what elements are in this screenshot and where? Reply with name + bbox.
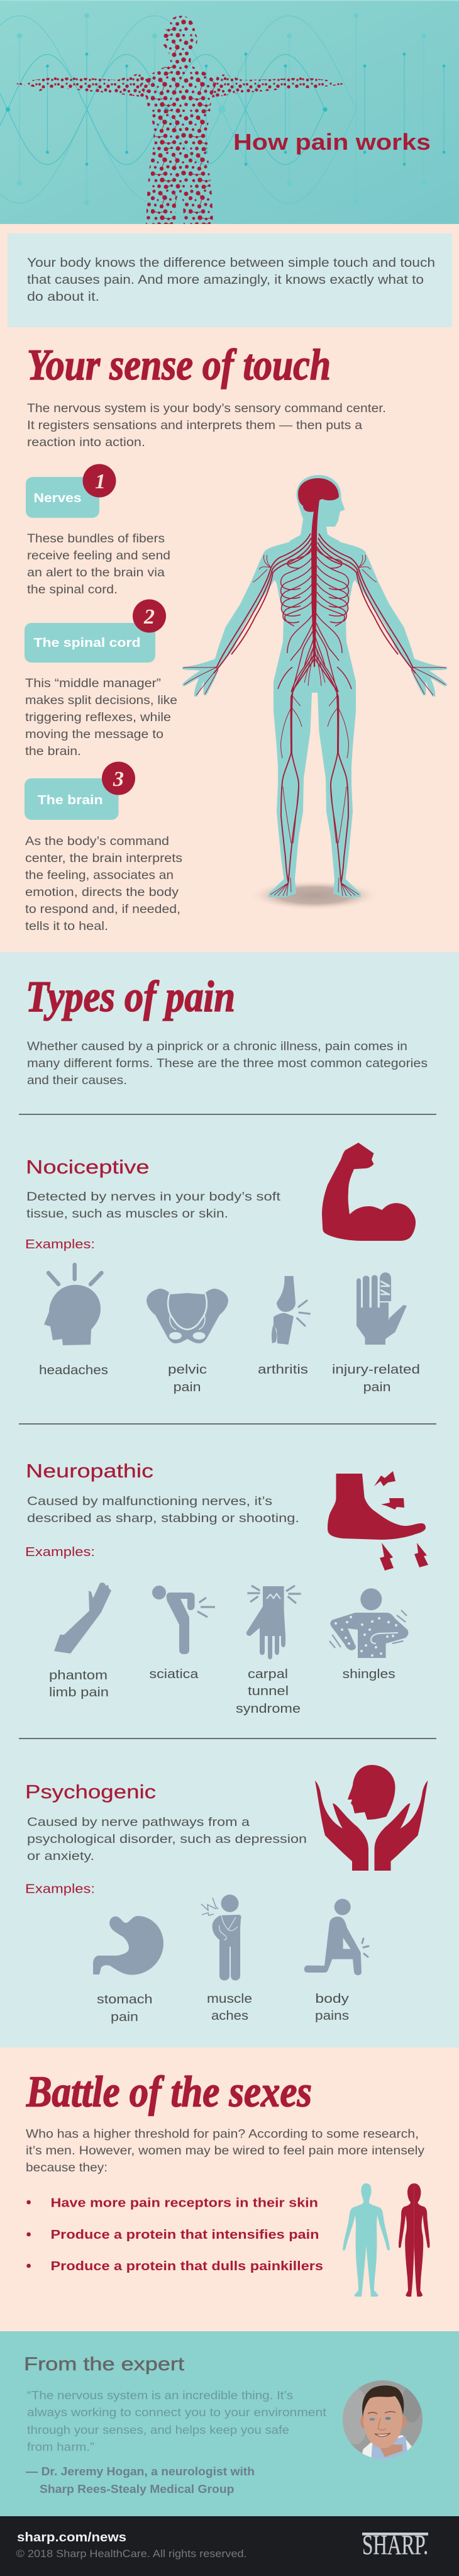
text: the spinal cord	[25, 676, 177, 758]
text: nerves: the spinal cord.	[27, 583, 118, 596]
text: the brain: center, the brain interprets	[25, 851, 182, 865]
icon: stomach	[93, 1916, 163, 1975]
labels: pelvic	[168, 1363, 207, 1377]
labels: sciatica	[149, 1667, 199, 1681]
bullet list: Have more pain receptors in their skin	[50, 2196, 318, 2210]
labels: carpal	[248, 1667, 288, 1681]
left nerves	[183, 534, 314, 896]
brain and spinal cord	[298, 478, 339, 667]
labels	[97, 1992, 349, 2024]
bullet list: Produce a protein that dulls painkillers	[50, 2260, 323, 2273]
labels: limb pain	[49, 1686, 109, 1700]
labels: body	[315, 1992, 349, 2006]
text: the spinal cord: This “middle manager”	[25, 676, 161, 690]
labels: stomach	[97, 1993, 152, 2007]
labels: headaches	[39, 1364, 108, 1377]
text: nerves	[27, 532, 170, 596]
heading: battle of the sexes: Battle of the sexes	[26, 2068, 312, 2117]
section: nociceptive: Examples:	[25, 1238, 95, 1252]
label: the brain	[25, 761, 135, 820]
label: nerves: Nerves	[34, 491, 82, 505]
label: the brain: The brain	[38, 793, 103, 807]
text: nerves: an alert to the brain via	[27, 566, 165, 580]
right nerves	[315, 534, 446, 896]
attribution	[26, 2465, 255, 2495]
icon: foot with lightning bolts	[328, 1471, 428, 1571]
illustration: nervous system figure	[182, 475, 448, 910]
text: the brain: the feeling, associates an	[25, 868, 174, 882]
text: the brain	[25, 834, 182, 933]
labels: arthritis	[258, 1363, 308, 1377]
text: nerves: receive feeling and send	[27, 549, 170, 563]
icon: body pains	[304, 1899, 368, 1975]
intro text	[27, 401, 386, 449]
label: the spinal cord	[25, 599, 166, 663]
text: the spinal cord: triggering reflexes, while	[25, 710, 171, 724]
description	[27, 1494, 299, 1525]
text: the spinal cord: makes split decisions, like	[25, 693, 177, 707]
intro text: because they:	[26, 2161, 108, 2175]
icon: phantom limb	[54, 1582, 111, 1654]
panel: header	[0, 0, 459, 224]
bullet list: Produce a protein that intensifies pain	[50, 2228, 319, 2242]
panel: intro: do about it.	[27, 290, 99, 304]
text: the brain: As the body’s command	[25, 834, 169, 848]
intro text	[27, 1039, 428, 1087]
text: the spinal cord: moving the message to	[25, 727, 163, 741]
head and neck	[289, 475, 345, 560]
quote: through your senses, and helps keep you safe	[27, 2423, 289, 2436]
section: neuropathic: Neuropathic	[26, 1460, 153, 1482]
intro text: reaction into action.	[27, 435, 145, 449]
icon: headaches	[44, 1265, 102, 1345]
description: psychological disorder, such as depression	[27, 1832, 307, 1846]
logo: SHARP: SHARP.	[362, 2529, 428, 2560]
DNA helix decoration	[0, 13, 445, 205]
labels	[39, 1363, 420, 1394]
intro text: many different forms. These are the three most common categories	[27, 1056, 428, 1070]
quote: “The nervous system is an incredible thing. It’s	[27, 2388, 293, 2402]
text: the brain: tells it to heal.	[25, 919, 108, 933]
title: How pain works	[233, 129, 431, 155]
section: nociceptive: Nociceptive	[26, 1156, 150, 1178]
labels: pain	[363, 1380, 391, 1394]
quote	[27, 2388, 326, 2453]
panel: intro	[8, 233, 452, 327]
description: Caused by nerve pathways from a	[27, 1815, 250, 1829]
attribution: — Dr. Jeremy Hogan, a neurologist with	[26, 2465, 255, 2478]
section: psychogenic: Psychogenic	[25, 1781, 156, 1803]
section: nociceptive	[25, 1143, 420, 1394]
text: nerves: These bundles of fibers	[27, 532, 165, 546]
quote: always working to connect you to your environment	[27, 2405, 326, 2419]
section: psychogenic	[25, 1765, 428, 2024]
labels: syndrome	[236, 1702, 301, 1716]
icon: muscle aches	[201, 1895, 241, 1981]
intro text: and their causes.	[27, 1073, 127, 1087]
description	[26, 1190, 281, 1221]
section: neuropathic	[25, 1460, 428, 1716]
panel: intro: Your body knows the difference between simple touch and touch	[27, 256, 435, 270]
heading: from the expert: From the expert	[24, 2354, 185, 2375]
labels: pains	[315, 2009, 349, 2023]
intro text: it’s men. However, women may be wired to feel pain more intensely	[26, 2144, 424, 2158]
section: neuropathic: Examples:	[25, 1545, 95, 1559]
panel: your sense of touch	[25, 341, 448, 933]
icon: pelvis	[147, 1289, 228, 1343]
intro text: It registers sensations and interprets them — then puts a	[27, 418, 362, 432]
icon: flexed arm	[322, 1143, 416, 1241]
quote: from harm.”	[27, 2440, 94, 2453]
labels	[49, 1667, 395, 1716]
labels: pain	[174, 1380, 201, 1394]
labels: aches	[211, 2009, 248, 2023]
icon: female figure	[399, 2183, 429, 2297]
icon: injured hand	[357, 1272, 407, 1345]
heading: your sense of touch: Your sense of touch	[27, 341, 331, 389]
description: Detected by nerves in your body’s soft	[26, 1190, 281, 1204]
labels: injury-related	[332, 1363, 420, 1377]
panel: intro: that causes pain. And more amazingly, it knows exactly what to	[27, 273, 424, 287]
intro text: Whether caused by a pinprick or a chronic illness, pain comes in	[27, 1039, 407, 1053]
icon: sciatica	[152, 1586, 215, 1654]
text: the spinal cord: the brain.	[25, 744, 81, 758]
section: psychogenic: Examples:	[25, 1883, 95, 1896]
icon: carpal tunnel	[246, 1586, 301, 1659]
description: or anxiety.	[27, 1849, 94, 1863]
text: the brain: to respond and, if needed,	[25, 902, 180, 916]
label: the brain: 3	[113, 768, 124, 791]
text: the brain: emotion, directs the body	[25, 885, 179, 899]
panel: battle of the sexes	[0, 2047, 459, 2331]
description	[27, 1815, 307, 1863]
labels: tunnel	[248, 1684, 289, 1698]
labels: phantom	[49, 1669, 108, 1683]
panel: types of pain	[0, 952, 459, 2047]
intro text: The nervous system is your body’s sensory command center.	[27, 401, 386, 415]
labels: muscle	[207, 1992, 252, 2006]
bullet list	[26, 2196, 323, 2273]
icon: hands holding head	[315, 1765, 428, 1871]
icon: shingles	[329, 1588, 408, 1658]
copyright: © 2018 Sharp HealthCare. All rights reserved.	[16, 2548, 247, 2560]
description: described as sharp, stabbing or shooting.	[27, 1511, 299, 1525]
link: sharp.com/news: sharp.com/news	[17, 2531, 126, 2545]
label: nerves: 1	[95, 470, 106, 493]
intro text: Who has a higher threshold for pain? According to some research,	[26, 2127, 419, 2141]
figure: human made of dots	[14, 16, 346, 224]
icon: male figure	[343, 2183, 390, 2297]
description: tissue, such as muscles or skin.	[26, 1207, 228, 1221]
label: the spinal cord: 2	[143, 605, 155, 629]
attribution: Sharp Rees-Stealy Medical Group	[40, 2482, 234, 2495]
heading: types of pain: Types of pain	[26, 973, 235, 1021]
intro text	[26, 2127, 424, 2175]
panel: from the expert	[0, 2331, 459, 2516]
photo: Dr. Jeremy Hogan	[343, 2380, 423, 2459]
description: Caused by malfunctioning nerves, it’s	[27, 1494, 272, 1508]
icon: knee joint	[272, 1276, 309, 1345]
panel: footer	[0, 2516, 459, 2576]
label: the spinal cord: The spinal cord	[34, 636, 141, 650]
label: nerves	[26, 464, 116, 518]
labels: pain	[111, 2010, 138, 2024]
labels: shingles	[343, 1667, 395, 1681]
